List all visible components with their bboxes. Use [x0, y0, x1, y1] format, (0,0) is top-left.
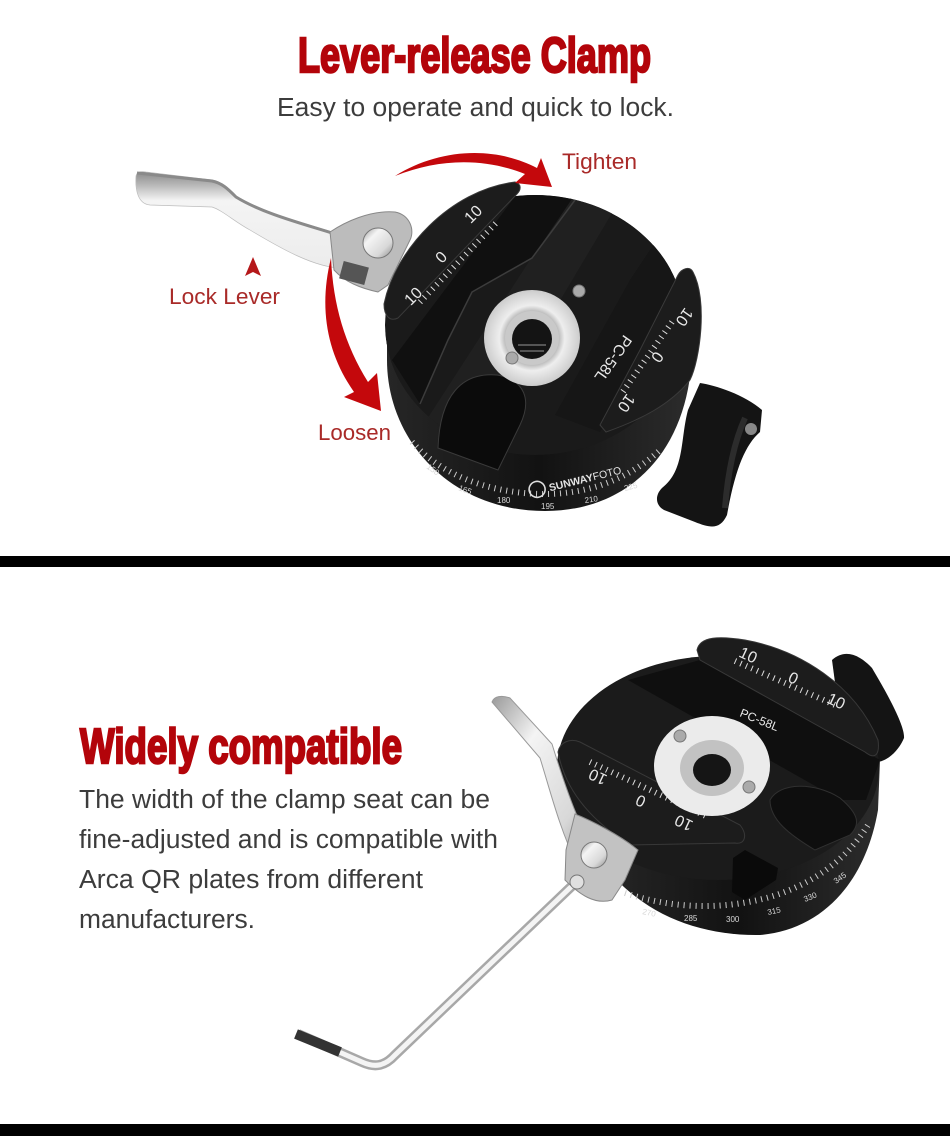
lock lever: [492, 696, 638, 901]
title: Lever-release Clamp: Lever-release Clamp: [298, 29, 651, 83]
brand logo: [527, 461, 623, 499]
base ring degree scale: 150: [425, 462, 441, 478]
arrow: loosen: [325, 258, 381, 411]
centre insert with threaded hole: [484, 285, 585, 386]
centre insert with hole: [654, 716, 770, 816]
brand logo: SUNWAYFOTO: [548, 465, 623, 494]
base ring degree scale: 330: [802, 890, 819, 904]
subtitle: Easy to operate and quick to lock.: [277, 94, 674, 122]
divider bar: top: [0, 556, 950, 567]
model label: PC-58L: [738, 706, 781, 734]
heading: Widely compatible: Widely compatible: [80, 720, 402, 774]
clamp base ring: [387, 320, 692, 511]
left scale rail: 10: [462, 202, 486, 227]
text block: compatibility description: manufacturers.: [79, 906, 255, 934]
base ring degree scale: 210: [584, 494, 599, 505]
hex key: [296, 884, 574, 1065]
icon: lock lever pointer: [245, 257, 261, 276]
product photo: clamp with lock lever: [136, 172, 762, 526]
lower scale rail: 10: [586, 765, 610, 788]
upper scale rail: 10: [736, 644, 760, 667]
clamp notch: [732, 850, 778, 900]
right scale rail: 10: [614, 390, 638, 415]
text block: compatibility description: [79, 786, 498, 934]
lower scale rail: 10: [672, 811, 696, 834]
right scale rail: 0: [647, 348, 666, 365]
locking knob: [657, 383, 762, 526]
base ring degree scale: 345: [832, 870, 849, 886]
left scale rail: 0: [433, 249, 451, 267]
right scale rail: 10: [672, 304, 696, 329]
upper scale rail: [697, 638, 878, 756]
label: Lock Lever: Lock Lever: [169, 284, 280, 309]
text block: compatibility description: fine-adjusted and is compatible with: [79, 826, 498, 854]
base ring degree scale: 270: [642, 907, 657, 919]
base ring degree scale: 300: [726, 915, 740, 924]
base ring degree scale: [625, 825, 868, 924]
upper scale rail: 0: [785, 669, 801, 689]
model label: PC-58L: [590, 332, 635, 385]
product photo: clamp with hex key: [296, 638, 904, 1065]
left scale rail: [384, 182, 520, 319]
top plate: [385, 195, 676, 424]
base ring degree scale: 165: [457, 483, 473, 497]
right scale rail: [600, 268, 701, 432]
top plate: [557, 656, 879, 880]
base ring degree scale: [412, 442, 660, 511]
lock lever: [136, 172, 412, 292]
label: Tighten: Tighten: [562, 149, 637, 174]
label: Loosen: Loosen: [318, 420, 391, 445]
thumb recess: [438, 375, 526, 470]
base ring degree scale: 315: [767, 905, 782, 917]
base ring degree scale: 180: [497, 496, 511, 505]
lower scale rail: [558, 740, 745, 845]
base ring degree scale: 225: [623, 481, 639, 493]
base ring degree scale: 195: [541, 502, 555, 511]
divider bar: bottom: [0, 1124, 950, 1136]
text block: compatibility description: Arca QR plates from different: [79, 866, 423, 894]
locking knob: [832, 654, 904, 762]
thumb recess: [770, 786, 857, 850]
text block: compatibility description: The width of the clamp seat can be: [79, 786, 490, 814]
lower scale rail: 0: [633, 790, 649, 810]
left scale rail: 10: [402, 284, 426, 309]
upper scale rail: 10: [824, 690, 848, 713]
base ring: [600, 760, 880, 935]
arrow: tighten: [395, 153, 552, 187]
base ring degree scale: 285: [684, 914, 698, 923]
